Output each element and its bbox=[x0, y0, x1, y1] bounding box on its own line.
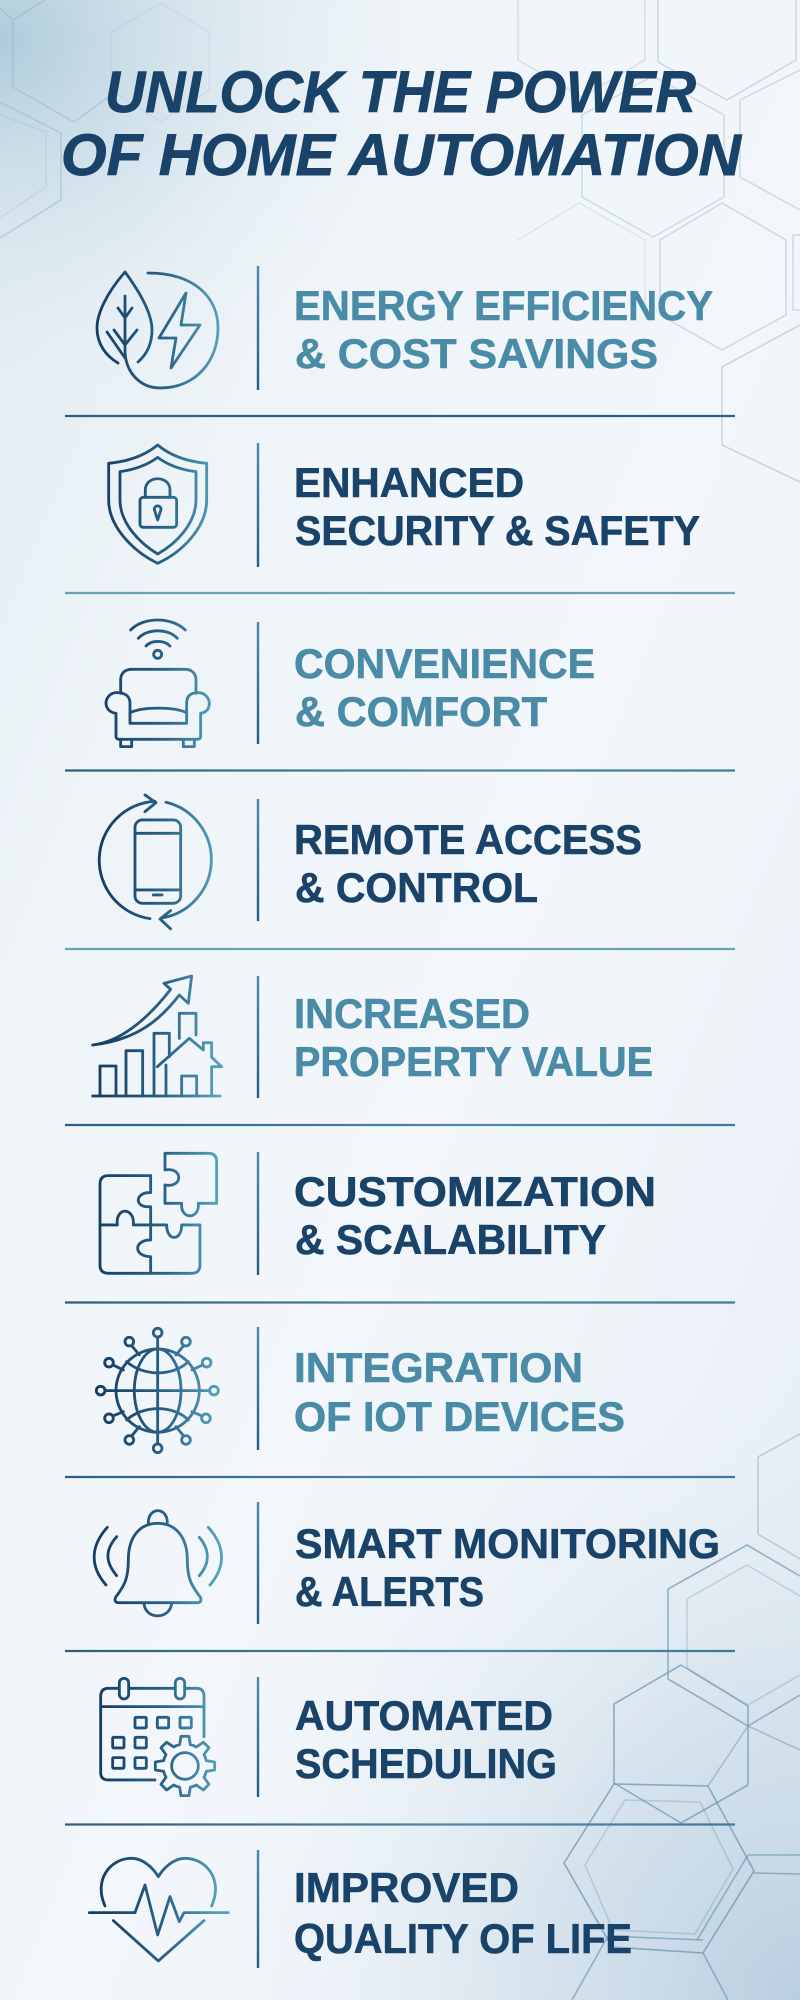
background hexagon pattern: bottom bbox=[564, 1434, 800, 2000]
label: SCHEDULING bbox=[295, 1740, 557, 1787]
label: & SCALABILITY bbox=[295, 1216, 606, 1263]
label: ENERGY EFFICIENCY bbox=[294, 282, 713, 329]
icon: connected globe bbox=[96, 1328, 218, 1453]
label bbox=[294, 1168, 656, 1263]
row: quality of life bbox=[89, 1850, 632, 1968]
label bbox=[294, 990, 653, 1085]
divider bbox=[257, 443, 259, 567]
row: IoT bbox=[96, 1327, 625, 1453]
row: convenience bbox=[106, 620, 595, 747]
divider bbox=[257, 1677, 259, 1797]
row: monitoring bbox=[94, 1502, 720, 1624]
row: energy efficiency bbox=[97, 266, 713, 390]
label: REMOTE ACCESS bbox=[294, 816, 642, 863]
row: property value bbox=[93, 976, 653, 1098]
row: remote access bbox=[99, 795, 642, 929]
label bbox=[294, 282, 713, 377]
divider bbox=[257, 1152, 259, 1275]
divider bbox=[257, 976, 259, 1098]
icon: calendar with gear bbox=[101, 1678, 215, 1796]
title: OF HOME AUTOMATION bbox=[61, 123, 742, 188]
label bbox=[294, 1864, 632, 1962]
label: AUTOMATED bbox=[295, 1692, 553, 1739]
label: & COST SAVINGS bbox=[295, 330, 658, 377]
row: customization bbox=[100, 1152, 656, 1275]
icon: bars, house and arrow bbox=[93, 976, 222, 1096]
row: security bbox=[109, 443, 700, 567]
label bbox=[295, 1520, 720, 1615]
label bbox=[294, 1344, 625, 1440]
divider bbox=[257, 1327, 259, 1450]
label: SMART MONITORING bbox=[295, 1520, 720, 1567]
divider bbox=[257, 1850, 259, 1968]
icon: phone with circular arrows bbox=[99, 795, 211, 929]
background hexagon pattern: top bbox=[0, 0, 800, 482]
title: UNLOCK THE POWER bbox=[105, 60, 696, 125]
label: QUALITY OF LIFE bbox=[294, 1915, 632, 1962]
icon: puzzle pieces bbox=[100, 1153, 217, 1273]
label bbox=[294, 459, 700, 554]
label: IMPROVED bbox=[294, 1864, 519, 1911]
row: scheduling bbox=[101, 1677, 557, 1797]
icon: ringing bell bbox=[94, 1511, 222, 1616]
divider bbox=[257, 799, 259, 921]
label bbox=[294, 640, 595, 735]
icon: wifi sofa bbox=[106, 620, 209, 747]
label: CONVENIENCE bbox=[294, 640, 595, 687]
icon: leaf and lightning bolt bbox=[97, 272, 218, 388]
label: & CONTROL bbox=[295, 864, 538, 911]
label: OF IOT DEVICES bbox=[294, 1393, 625, 1440]
divider bbox=[257, 622, 259, 744]
label: PROPERTY VALUE bbox=[294, 1038, 653, 1085]
icon: shield with lock bbox=[109, 445, 207, 563]
label: INTEGRATION bbox=[294, 1344, 583, 1391]
label: & COMFORT bbox=[295, 688, 547, 735]
separators bbox=[65, 416, 735, 1824]
title bbox=[61, 60, 742, 188]
divider bbox=[257, 1502, 259, 1624]
label bbox=[295, 1692, 557, 1787]
label: INCREASED bbox=[294, 990, 530, 1037]
icon: heart with pulse bbox=[89, 1858, 228, 1961]
divider bbox=[257, 266, 259, 390]
label: CUSTOMIZATION bbox=[294, 1168, 656, 1215]
label bbox=[294, 816, 642, 911]
label: ENHANCED bbox=[294, 459, 524, 506]
label: & ALERTS bbox=[295, 1568, 484, 1615]
label: SECURITY & SAFETY bbox=[295, 507, 700, 554]
